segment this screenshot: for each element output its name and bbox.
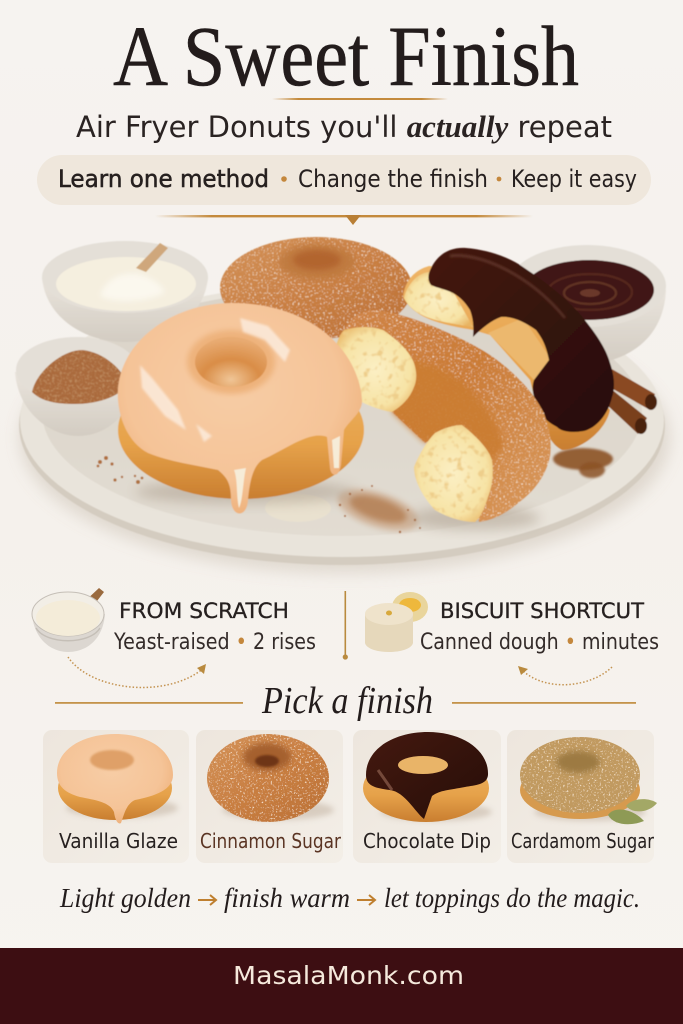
- divider line with dot: [343, 591, 348, 660]
- tagline pill: [37, 155, 651, 205]
- dotted arrow: [68, 657, 206, 688]
- method: from scratch: [32, 588, 316, 688]
- cinnamon sticks: [606, 368, 657, 434]
- glazed donut shadow on plate: [135, 480, 355, 504]
- smooth inner band: [392, 360, 504, 462]
- plate shadow: [20, 303, 670, 573]
- footer band: MasalaMonk.com: [233, 961, 464, 990]
- card: chocolate dip: Chocolate Dip: [363, 829, 491, 853]
- glaze highlights: [140, 318, 290, 442]
- arrow: [357, 895, 375, 905]
- method: biscuit shortcut: [365, 592, 659, 685]
- hero photo: donut plate: [15, 237, 670, 573]
- cut face top: [335, 327, 416, 412]
- icon: biscuit rounds: [365, 592, 428, 652]
- closing tagline: [59, 883, 640, 913]
- plate: [19, 283, 665, 565]
- glazed donut hole: [187, 330, 275, 394]
- icon: cardamom pods: [608, 799, 657, 824]
- donut body: [344, 310, 551, 522]
- closing tagline: finish warm: [224, 883, 350, 913]
- arrow: [198, 895, 216, 905]
- pill text: keep it easy: Keep it easy: [511, 165, 637, 193]
- footer band: [0, 948, 683, 1024]
- card: chocolate dip: [353, 730, 501, 863]
- cinnamon spill on plate: [97, 448, 613, 539]
- subtitle: Air Fryer Donuts you'll actually repeat: [76, 109, 612, 144]
- cut face bottom: [414, 425, 493, 522]
- chevron divider: [155, 215, 533, 225]
- card: vanilla glaze: Vanilla Glaze: [59, 829, 178, 853]
- card: cardamom sugar: Cardamom Sugar: [511, 829, 655, 853]
- chocolate donut cut face: [404, 272, 473, 327]
- sugar donut (back): [220, 237, 412, 339]
- cut cinnamon donut: [335, 310, 551, 522]
- pill text: change the finish: Change the finish: [298, 165, 488, 193]
- finish cards: [43, 730, 657, 863]
- pill dot: [497, 177, 501, 181]
- heading: BISCUIT SHORTCUT: [440, 599, 644, 623]
- chocolate bowl: [508, 245, 666, 363]
- title: A Sweet Finish: [113, 8, 579, 104]
- glazed donut: [118, 303, 364, 514]
- description: Canned dough • minutes: [420, 630, 659, 655]
- title underline: [272, 98, 448, 100]
- cinnamon bowl: [15, 337, 138, 436]
- card: vanilla glaze: [43, 730, 189, 863]
- card: cardamom sugar: [507, 730, 657, 863]
- closing tagline: let toppings do the magic.: [384, 883, 640, 913]
- cream bowl: [42, 241, 208, 342]
- glaze puddle: [265, 494, 331, 522]
- icon: bowl of dough: [32, 588, 105, 652]
- chocolate glaze: [428, 248, 614, 432]
- card: cinnamon sugar: [196, 730, 343, 863]
- description: Yeast-raised • 2 rises: [113, 630, 316, 655]
- closing tagline: Light golden: [59, 883, 191, 913]
- drip highlights: [234, 468, 246, 508]
- dotted arrow: [518, 666, 612, 685]
- heading: FROM SCRATCH: [119, 599, 289, 623]
- card: cinnamon sugar: Cinnamon Sugar: [200, 829, 342, 853]
- section heading: pick a finish: Pick a finish: [261, 680, 433, 722]
- cut donut shadow on plate: [410, 506, 540, 530]
- chocolate donut: [403, 248, 614, 450]
- pill dot: [281, 176, 287, 182]
- pill text: learn one method: Learn one method: [58, 165, 269, 193]
